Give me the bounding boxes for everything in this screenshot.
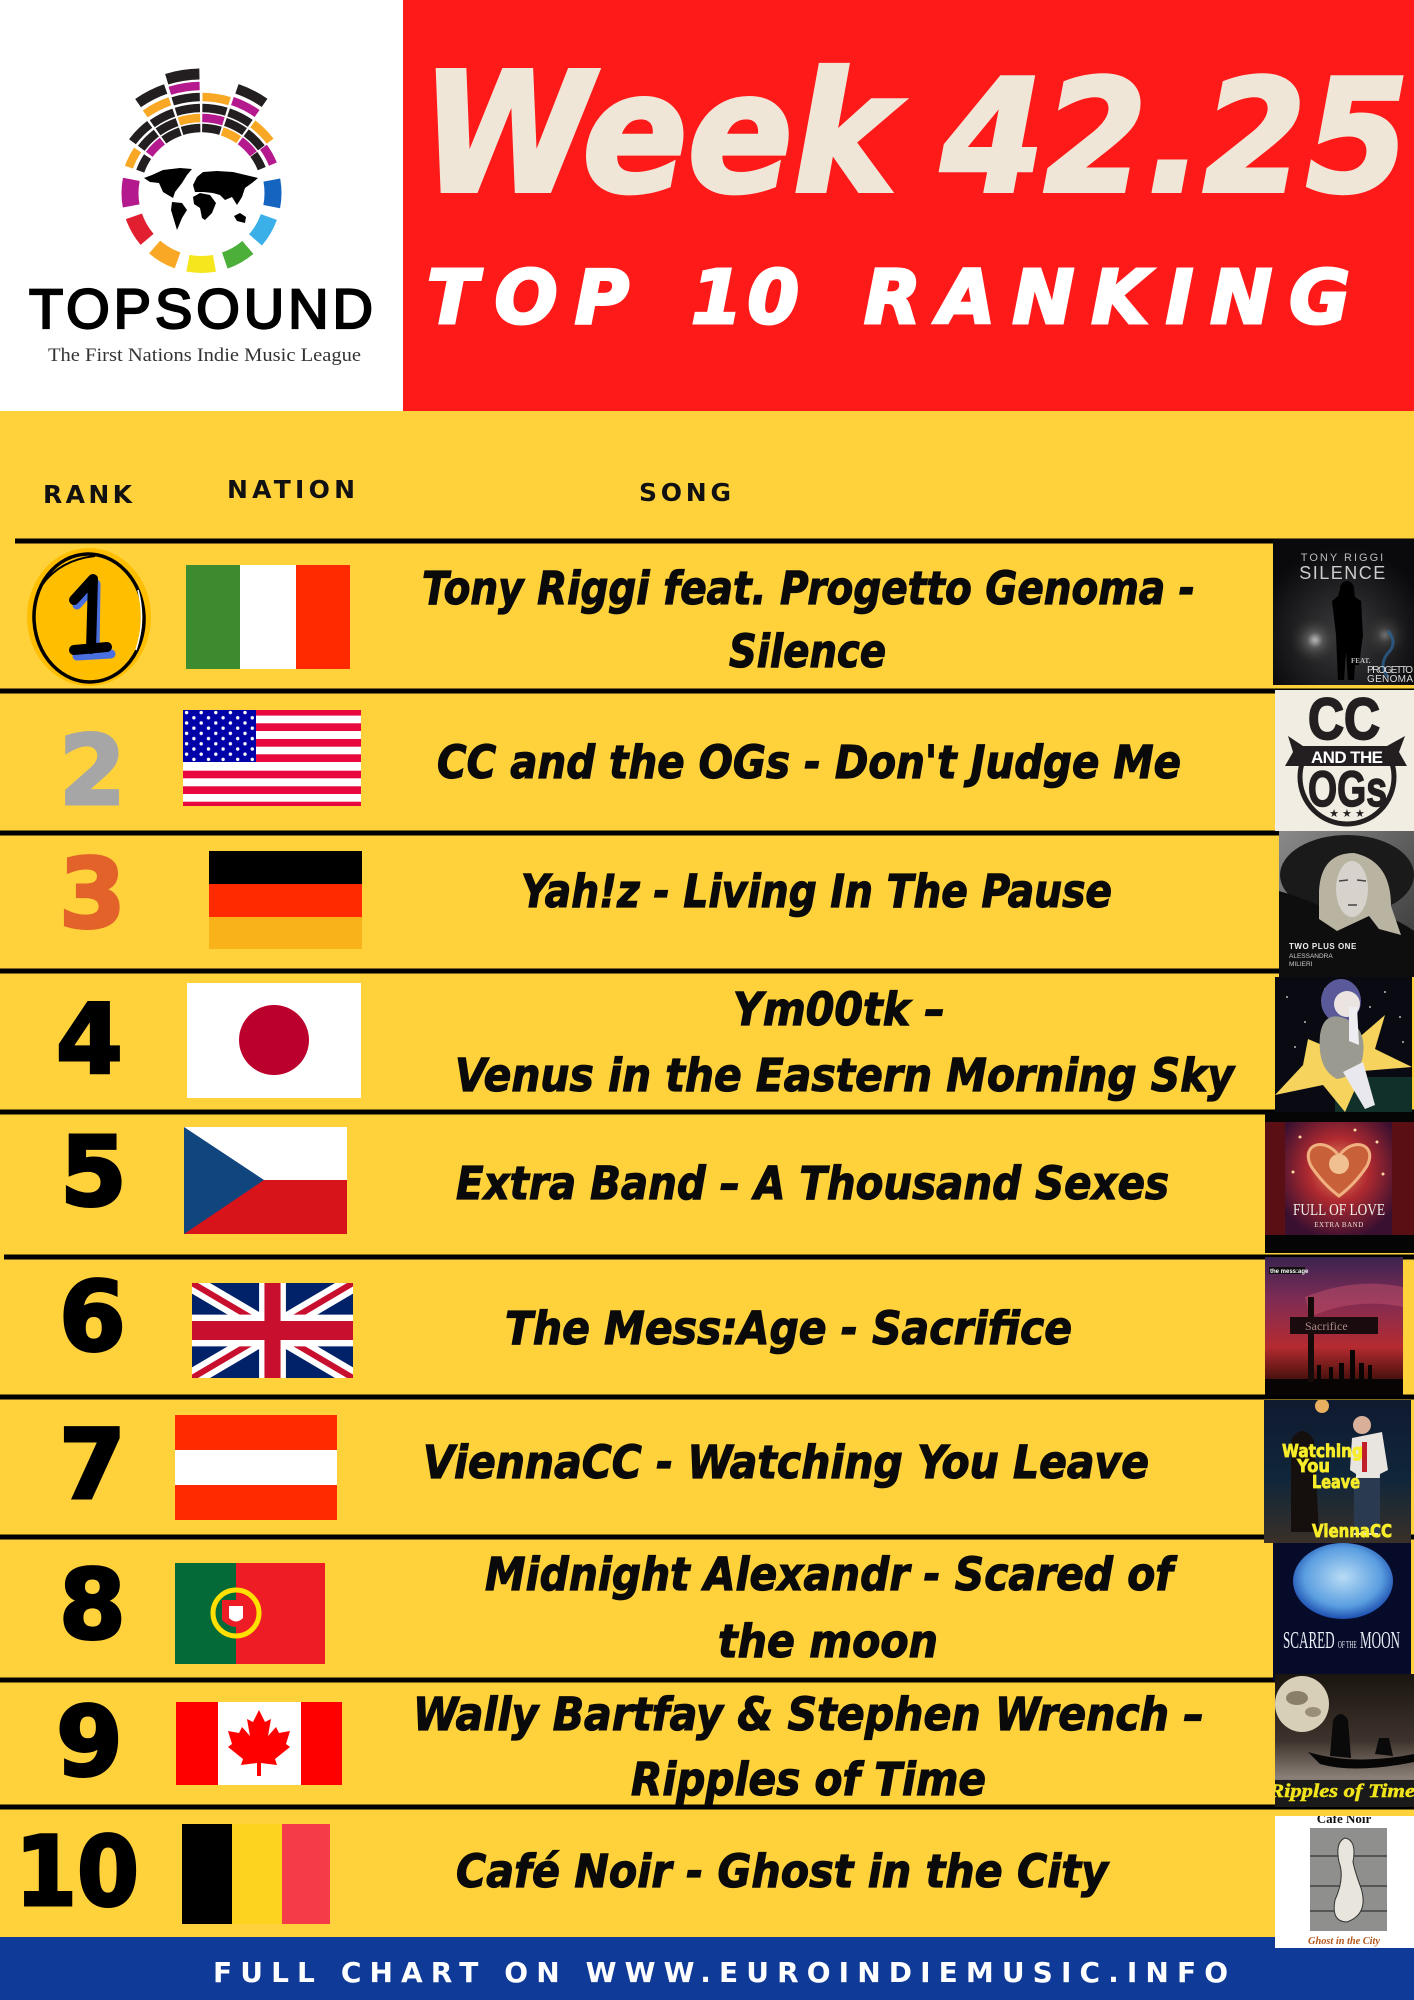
song 1: Tony Riggi feat. Progetto Genoma - <box>422 562 1195 615</box>
cover 5: Full of Love: EXTRA BAND <box>1314 1221 1364 1229</box>
subtitle: top 10 ranking: TOP <box>427 255 629 341</box>
song 8: the moon <box>718 1615 938 1668</box>
rank 8 row <box>59 1543 1411 1680</box>
cover 1: Silence: SILENCE <box>1299 563 1387 583</box>
flag: Belgium <box>182 1824 330 1924</box>
cover 1: Silence <box>1273 539 1414 685</box>
rank 6 number: 6 <box>59 1261 126 1373</box>
song 10: Café Noir - Ghost in the City <box>456 1845 1110 1898</box>
logo: equalizer fan <box>48 40 355 346</box>
song 7: ViennaCC - Watching You Leave <box>423 1436 1149 1489</box>
song 3: Yah!z - Living In The Pause <box>521 865 1112 918</box>
rank 2 number: 2 <box>59 715 126 827</box>
rank 1 row <box>27 539 1414 686</box>
header: red title panel <box>403 0 1414 411</box>
flag: Czech Republic <box>184 1127 347 1234</box>
logo: coloured ring <box>101 92 302 294</box>
header: logo panel <box>0 0 403 411</box>
subtitle: top 10 ranking: RANKING <box>864 255 1350 341</box>
cover 10: Ghost in the City <box>1275 1811 1414 1948</box>
cover 1: Silence: TONY RIGGI <box>1301 552 1385 564</box>
cover 5: Full of Love <box>1265 1114 1414 1253</box>
rank 1 badge <box>27 548 151 686</box>
rank 3 number: 3 <box>59 838 126 950</box>
cover 1: Silence: FEAT. <box>1351 657 1371 665</box>
song 4: Venus in the Eastern Morning Sky <box>455 1049 1236 1102</box>
cover 3: Two Plus One: ALESSANDRA <box>1289 953 1333 960</box>
column headers: RANK <box>43 480 134 509</box>
song 2: CC and the OGs - Don't Judge Me <box>437 736 1181 789</box>
cover 2: CC and the OGs: AND THE <box>1311 748 1383 767</box>
rank 9 number: 9 <box>56 1686 123 1798</box>
cover 4: anime girl on star <box>1275 977 1412 1112</box>
rank 5 number: 5 <box>60 1116 127 1228</box>
song 8: Midnight Alexandr - Scared of <box>485 1548 1178 1601</box>
cover 9: Ripples of Time: Ripples of Time <box>1268 1781 1414 1802</box>
cover 2: CC and the OGs: ★ ★ ★ <box>1329 808 1365 820</box>
cover 5: Full of Love: FULL OF LOVE <box>1293 1200 1385 1219</box>
song 1: Silence <box>729 625 886 678</box>
cover 2: CC and the OGs <box>1275 687 1414 831</box>
logo wordmark: TOPSOUND <box>29 277 373 340</box>
song 8 <box>485 1548 1178 1668</box>
cover 7: Watching You Leave <box>1264 1400 1411 1543</box>
flag: Canada <box>176 1702 342 1785</box>
column headers: NATION <box>227 475 355 504</box>
rank 10 number: 10 <box>15 1816 139 1928</box>
column headers <box>43 475 731 509</box>
rank 4 row <box>56 977 1412 1112</box>
cover 3: Two Plus One: MILIERI <box>1289 961 1313 968</box>
song 9 <box>413 1688 1204 1806</box>
rank 9 row <box>56 1674 1414 1807</box>
cover 8: Scared of the Moon <box>1273 1543 1411 1680</box>
cover 10: Ghost in the City: Ghost in the City <box>1308 1936 1381 1947</box>
flag: United Kingdom <box>192 1283 353 1378</box>
cover 6: Sacrifice: the mess:age <box>1270 1269 1309 1275</box>
cover 1: Silence: PROGETTO <box>1367 665 1413 676</box>
rank 5 row <box>60 1112 1414 1253</box>
flag: Japan <box>187 983 361 1098</box>
rank 7 row <box>59 1399 1411 1543</box>
cover 3: Two Plus One: TWO PLUS ONE <box>1289 942 1357 951</box>
footer bar <box>0 1937 1414 2000</box>
song 4: Ym00tk – <box>733 983 945 1036</box>
cover 7: Watching You Leave: Leave <box>1312 1472 1360 1493</box>
flag: Portugal <box>175 1563 325 1664</box>
title: week number: Week <box>421 38 904 231</box>
rank 10 row <box>15 1816 1110 1928</box>
flag: Italy <box>186 565 350 669</box>
song 1 <box>422 562 1195 678</box>
logo tagline: The First Nations Indie Music League <box>48 345 361 366</box>
song 4 <box>455 983 1236 1102</box>
subtitle: top 10 ranking <box>427 255 1350 341</box>
cover 10: Ghost in the City: Café Noir <box>1317 1811 1371 1826</box>
song 9: Wally Bartfay & Stephen Wrench – <box>413 1688 1204 1741</box>
song 5: Extra Band – A Thousand Sexes <box>456 1157 1169 1210</box>
cover 7: Watching You Leave: ViennaCC <box>1312 1521 1392 1542</box>
rank 8 number: 8 <box>59 1549 126 1661</box>
cover 2: CC and the OGs: CC <box>1308 687 1380 752</box>
flag: Austria <box>175 1415 337 1520</box>
cover 6: Sacrifice <box>1265 1257 1403 1394</box>
rank 6 row <box>59 1257 1403 1395</box>
flag: Germany <box>209 851 362 949</box>
song 6: The Mess:Age - Sacrifice <box>505 1302 1072 1355</box>
cover 9: Ripples of Time <box>1268 1674 1414 1807</box>
logo: world map <box>144 168 258 230</box>
rank 7 number: 7 <box>59 1409 126 1521</box>
flag: USA <box>183 710 361 806</box>
title: week number <box>421 38 1409 231</box>
rank 3 row <box>59 831 1414 977</box>
cover 7: Watching You Leave: You <box>1296 1456 1330 1477</box>
cover 6: Sacrifice: Sacrifice <box>1305 1319 1348 1333</box>
rank 2 row <box>59 687 1414 831</box>
subtitle: top 10 ranking: 10 <box>691 255 799 341</box>
column headers: SONG <box>639 478 731 507</box>
cover 2: CC and the OGs: OGs <box>1308 761 1387 817</box>
cover 1: Silence: GENOMA <box>1367 674 1413 685</box>
cover 7: Watching You Leave: Watching <box>1282 1441 1363 1462</box>
rank 4 number: 4 <box>56 984 123 1096</box>
song 9: Ripples of Time <box>631 1753 986 1806</box>
footer text: FULL CHART ON WWW.EUROINDIEMUSIC.INFO <box>213 1956 1228 1989</box>
cover 3: Two Plus One <box>1279 831 1414 977</box>
